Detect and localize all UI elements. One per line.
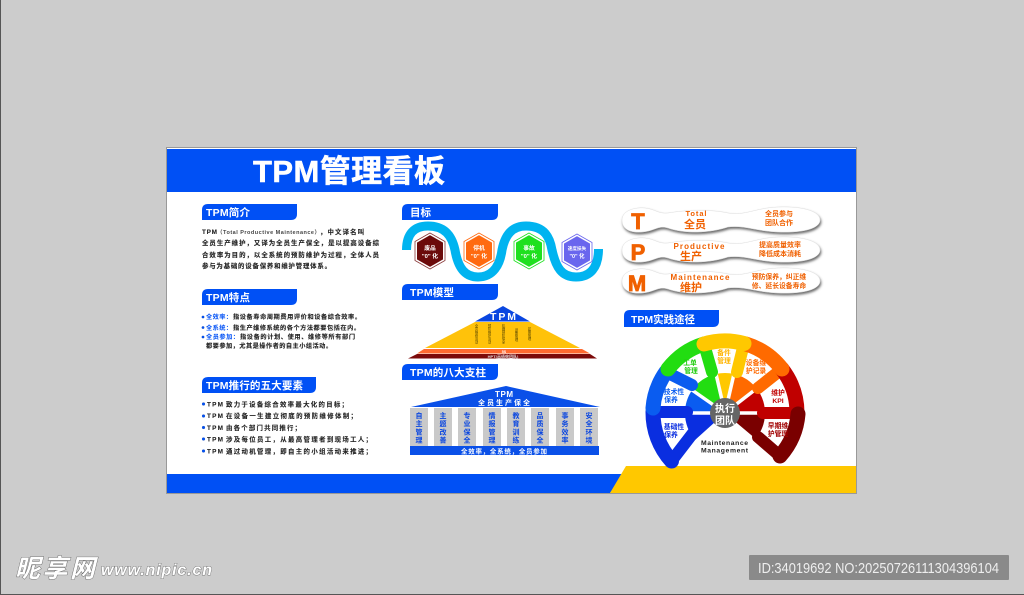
pillars: 率 bbox=[562, 436, 568, 444]
blob: M: M bbox=[628, 271, 646, 296]
features text: 全效率： bbox=[206, 313, 232, 321]
panel: five elements bbox=[202, 377, 372, 456]
features text: 指设备寿命周期费用评价和设备综合效率。 bbox=[233, 313, 361, 321]
pillars: 理 bbox=[416, 436, 422, 444]
goal hexagon: accidents: "0" 化 bbox=[521, 252, 537, 260]
goal hexagon: downtime: "0" 化 bbox=[471, 252, 487, 260]
pillars: 情 bbox=[488, 411, 496, 420]
footer blue band bbox=[167, 474, 624, 493]
blob: M: 修、延长设备寿命 bbox=[752, 281, 806, 290]
heading: TPM简介 bbox=[202, 204, 297, 220]
pillars: 管 bbox=[416, 428, 422, 436]
roof: TPM bbox=[495, 390, 513, 399]
pillars: 理 bbox=[488, 436, 496, 444]
pillars: 保 bbox=[464, 428, 470, 436]
pillars: 保 bbox=[536, 428, 544, 436]
goal hexagon: speed loss: 速度损失 bbox=[568, 245, 587, 252]
five elements list: TPM bbox=[207, 425, 223, 432]
blob: T: 团队合作 bbox=[765, 218, 793, 227]
blob: T: Total bbox=[686, 209, 706, 218]
intro text: ，中文译名叫 bbox=[320, 227, 364, 236]
base: 全效率，全系统，全员参加 bbox=[461, 446, 547, 455]
five elements list bbox=[202, 400, 372, 456]
intro text: 参与为基础的设备保养和维护管理体系。 bbox=[202, 261, 331, 270]
pyramid chart: 全员维修活动 bbox=[474, 323, 478, 344]
goal hexagon: downtime bbox=[464, 233, 494, 269]
five elements list: 由各个部门共同推行； bbox=[226, 423, 301, 432]
heading: eight pillars: TPM的八大支柱 bbox=[410, 366, 486, 379]
blob: P: 生产 bbox=[680, 249, 702, 263]
watermark logo: 昵享网 bbox=[15, 555, 99, 583]
pillars: 环 bbox=[586, 428, 592, 436]
fan labels: 维护 bbox=[771, 388, 785, 397]
heading: TPM模型: TPM模型 bbox=[410, 286, 454, 299]
goal hexagon: defects: 废品 bbox=[424, 244, 436, 252]
heading: five elements: TPM推行的五大要素 bbox=[206, 379, 304, 392]
panel: TPM meaning bbox=[622, 207, 820, 296]
blob: T: T bbox=[631, 209, 645, 234]
blob: P: P bbox=[631, 240, 645, 265]
pyramid chart: 初期管理 bbox=[527, 326, 531, 341]
blob: P: Productive bbox=[674, 242, 725, 251]
roof bbox=[411, 386, 600, 407]
goal hexagon: accidents: 事故 bbox=[523, 244, 535, 252]
five elements list: 致力于设备综合效率最大化的目标； bbox=[226, 400, 348, 408]
intro text bbox=[202, 227, 380, 270]
goal hexagon: speed loss bbox=[562, 234, 592, 270]
panel: TPM model bbox=[402, 284, 597, 359]
center hub: 团队 bbox=[715, 414, 735, 427]
fan labels: 工单 bbox=[683, 358, 697, 367]
pyramid chart: 机器预防保全 bbox=[501, 323, 505, 344]
five elements list: TPM bbox=[207, 448, 223, 456]
pillars: 善 bbox=[440, 436, 446, 444]
goal hexagon: downtime: 停机 bbox=[473, 244, 485, 252]
five elements list: 通过动机管理，即自主的小组活动来推进； bbox=[226, 446, 372, 456]
fan labels: 保养 bbox=[664, 430, 678, 439]
features text: 指设备的计划、使用、维修等所有部门 bbox=[240, 333, 355, 341]
pyramid chart: 设备管理 bbox=[514, 327, 518, 342]
panel: eight pillars bbox=[402, 364, 600, 455]
pyramid chart bbox=[408, 306, 597, 359]
footer yellow band bbox=[610, 466, 856, 493]
pillars: 训 bbox=[512, 428, 520, 436]
watermark logo bbox=[15, 555, 212, 583]
pillars: 教 bbox=[512, 411, 520, 420]
fan labels: 管理 bbox=[717, 356, 731, 365]
features text: 全员参加： bbox=[206, 333, 239, 341]
center hub: 执行 bbox=[715, 402, 735, 415]
heading: practice path: TPM实践途径 bbox=[631, 313, 696, 326]
goal hexagon: speed loss: "0" 化 bbox=[570, 252, 585, 260]
heading: eight pillars bbox=[402, 364, 498, 380]
blob: M: Maintenance bbox=[670, 273, 730, 282]
serpentine ribbon bbox=[406, 226, 598, 277]
blob: M bbox=[622, 268, 820, 296]
pillars: 品 bbox=[536, 412, 544, 420]
fan labels: 护管理 bbox=[768, 429, 788, 438]
pillars: 练 bbox=[512, 436, 520, 444]
blob: P: 提高质量效率 bbox=[759, 240, 801, 249]
pillars: 质 bbox=[536, 419, 544, 428]
pillars: 全 bbox=[536, 436, 544, 444]
features text: 都要参加，尤其是操作者的自主小组活动。 bbox=[206, 342, 332, 350]
pillars: 育 bbox=[512, 419, 520, 428]
fan labels: 技术性 bbox=[664, 387, 684, 396]
fan labels: 基础性 bbox=[664, 422, 684, 431]
five elements list: TPM bbox=[207, 436, 223, 444]
panel: TPM features bbox=[202, 289, 361, 350]
intro text: （Total Productive Maintenance） bbox=[217, 229, 320, 236]
radial arms bbox=[653, 344, 797, 461]
board bbox=[166, 148, 856, 494]
goal hexagon: accidents bbox=[514, 233, 544, 269]
five elements list: TPM bbox=[207, 402, 223, 408]
panel: goals bbox=[402, 204, 598, 277]
heading: practice path bbox=[624, 310, 719, 327]
features text: 全系统： bbox=[206, 324, 232, 332]
pillars: 全 bbox=[464, 436, 470, 444]
inner wedges bbox=[685, 373, 765, 440]
blob: M: 预防保养，纠正维 bbox=[752, 272, 806, 281]
fan labels: 备件 bbox=[717, 348, 731, 357]
pillars: 题 bbox=[440, 420, 446, 428]
pyramid chart: TPM bbox=[490, 311, 516, 323]
fan labels: 护记录 bbox=[746, 366, 766, 375]
base bbox=[410, 446, 599, 455]
pillars: 务 bbox=[562, 419, 568, 428]
heading: five elements bbox=[202, 377, 316, 393]
pyramid chart: 5S bbox=[502, 350, 507, 354]
five elements list: TPM bbox=[207, 413, 223, 420]
intro text: 全员生产维护，又译为全员生产保全，是以提高设备综 bbox=[202, 238, 380, 247]
goal hexagon: defects: "0" 化 bbox=[422, 252, 438, 260]
pillars: 效 bbox=[562, 428, 568, 436]
fan caption: Management bbox=[701, 448, 749, 454]
pillars: 改 bbox=[440, 428, 446, 436]
pillars: 自 bbox=[416, 411, 422, 420]
blob: T: 全员 bbox=[684, 217, 706, 231]
heading: TPM特点 bbox=[202, 289, 297, 305]
five elements list: 涉及每位员工，从最高管理者到现场工人； bbox=[226, 434, 372, 444]
blob: T: 全员参与 bbox=[765, 209, 793, 218]
pillars: 事 bbox=[562, 411, 568, 420]
heading: TPM简介: TPM简介 bbox=[206, 206, 250, 219]
pillars bbox=[410, 408, 598, 446]
five elements list: 在设备一生建立彻底的预防维修体制； bbox=[226, 411, 357, 420]
pillars: 主 bbox=[440, 411, 446, 420]
heading: 目标 bbox=[402, 204, 498, 220]
pillars: 安 bbox=[586, 411, 592, 420]
goal hexagon: defects bbox=[415, 233, 445, 269]
image id stamp bbox=[749, 555, 1009, 580]
features text: 指生产维修系统的各个方法都要包括在内。 bbox=[233, 324, 360, 332]
pillars: 全 bbox=[586, 419, 592, 428]
pillars: 境 bbox=[586, 436, 592, 444]
blob: P bbox=[622, 237, 820, 265]
blob: M: 维护 bbox=[680, 280, 702, 294]
blob: T bbox=[622, 207, 820, 234]
fan caption bbox=[701, 440, 749, 454]
heading: TPM模型 bbox=[402, 284, 498, 300]
outer rim bbox=[653, 341, 798, 461]
fan labels: 保养 bbox=[664, 395, 678, 404]
panel: TPM intro bbox=[202, 204, 380, 270]
pyramid chart: 预防维护活动 bbox=[487, 323, 491, 344]
intro text: TPM bbox=[202, 229, 217, 236]
pillars: 报 bbox=[488, 419, 496, 428]
intro text: 合效率为目的，以全系统的预防维护为过程，全体人员 bbox=[202, 250, 380, 259]
fan labels: 早期维 bbox=[768, 421, 788, 430]
center hub bbox=[710, 398, 740, 428]
header band bbox=[167, 149, 856, 192]
fan diagram bbox=[653, 341, 798, 461]
fan labels: 设备维 bbox=[746, 358, 766, 367]
blob: P: 降低成本消耗 bbox=[759, 249, 801, 258]
title: TPM管理看板 bbox=[253, 154, 445, 189]
watermark logo: www.nipic.cn bbox=[101, 562, 212, 579]
roof: 全员生产保全 bbox=[478, 398, 530, 407]
pillars: 专 bbox=[464, 411, 470, 420]
fan caption: Maintenance bbox=[701, 440, 748, 447]
features text bbox=[202, 313, 361, 350]
heading: 目标: 目标 bbox=[410, 206, 432, 219]
heading: TPM特点: TPM特点 bbox=[206, 291, 250, 304]
fan labels: KPI bbox=[772, 398, 784, 405]
pillars: 业 bbox=[464, 419, 470, 428]
pillars: 主 bbox=[416, 419, 422, 428]
fan labels: 管理 bbox=[684, 366, 698, 375]
fan labels bbox=[664, 348, 788, 439]
pillars: 管 bbox=[488, 428, 496, 436]
pyramid chart: HPT(高绩效团队) bbox=[488, 353, 519, 359]
panel: TPM practice path bbox=[624, 310, 798, 461]
